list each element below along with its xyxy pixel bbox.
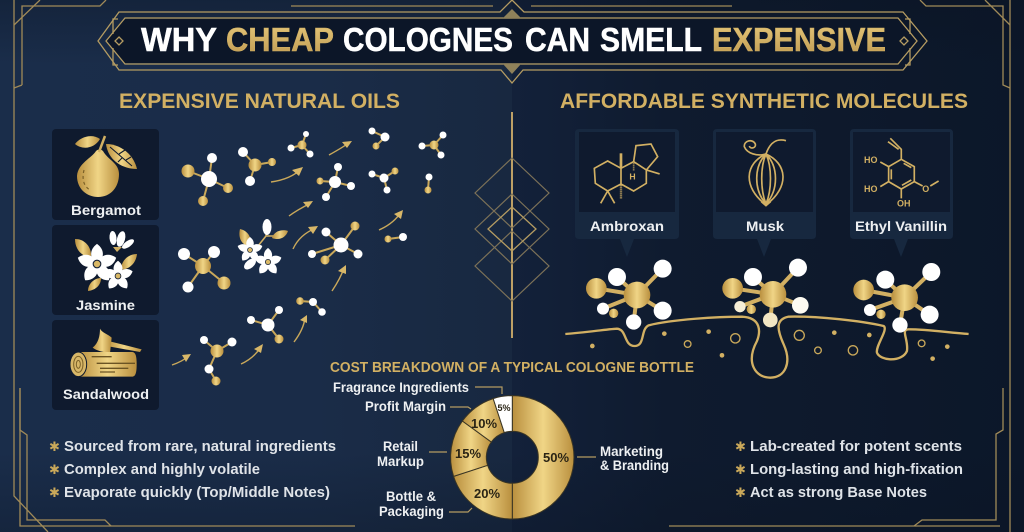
icon: ethyl vanillin structure: HO <box>864 184 877 194</box>
left bullet list: ✱ <box>49 463 60 478</box>
label: Ambroxan <box>590 218 664 234</box>
right bullet list: Act as strong Base Notes <box>750 484 927 501</box>
icon: ethyl vanillin structure: O <box>922 184 929 194</box>
label: Musk <box>746 218 784 234</box>
percent labels: 50% <box>543 450 569 465</box>
left bullet list: Sourced from rare, natural ingredients <box>64 438 336 455</box>
chart labels: Retail <box>383 439 418 454</box>
chart labels: & Branding <box>600 458 669 473</box>
percent labels: 15% <box>455 446 481 461</box>
heading: affordable synthetic molecules: AFFORDABLE SYNTHETIC MOLECULES <box>560 90 968 113</box>
molecules: natural oils evaporating <box>172 128 446 386</box>
title <box>141 21 886 58</box>
molecule b <box>722 259 809 327</box>
label: Sandalwood <box>63 386 149 402</box>
percent labels <box>455 403 569 501</box>
chart labels <box>333 380 669 519</box>
molecule 5 <box>418 132 446 158</box>
molecule 11 <box>178 246 230 292</box>
icon: musk pod <box>744 140 786 206</box>
percent labels: 5% <box>497 403 511 413</box>
molecule 9 <box>308 222 362 264</box>
right bullet list: Long-lasting and high-fixation <box>750 461 963 478</box>
title banner <box>98 0 927 83</box>
jasmine sprig <box>237 219 288 276</box>
title: COLOGNES <box>343 21 513 58</box>
right bullet list: ✱ <box>735 486 746 501</box>
icon: ethyl vanillin structure: HO <box>864 155 877 165</box>
molecule 13 <box>247 306 284 344</box>
center divider with diamonds <box>475 112 549 338</box>
card: bergamot <box>52 129 159 220</box>
molecule 2 <box>238 147 276 186</box>
right bullet list: ✱ <box>735 440 746 455</box>
icon: bergamot <box>75 136 137 197</box>
slices <box>451 396 574 519</box>
title: CAN <box>525 21 590 58</box>
molecule 12 <box>200 336 236 386</box>
chart labels: Marketing <box>600 444 663 459</box>
left bullet list: Evaporate quickly (Top/Middle Notes) <box>64 484 330 501</box>
chart labels: Fragrance Ingredients <box>333 380 469 395</box>
molecule 3 <box>288 131 314 158</box>
arrows <box>172 141 403 365</box>
icon: log and axe <box>70 329 142 377</box>
particles <box>590 329 950 361</box>
percent labels: 10% <box>471 416 497 431</box>
percent labels: 20% <box>474 486 500 501</box>
card: jasmine <box>52 225 159 315</box>
molecule a <box>586 260 672 330</box>
title: WHY <box>141 21 217 58</box>
label: Ethyl Vanillin <box>855 218 947 234</box>
card: musk <box>713 129 816 257</box>
left bullet list: ✱ <box>49 486 60 501</box>
molecule 6 <box>316 163 355 201</box>
molecule 4 <box>368 128 390 150</box>
chart labels: Profit Margin <box>365 399 446 414</box>
right bullet list: ✱ <box>735 463 746 478</box>
diagram: molecules penetrating skin <box>565 259 969 378</box>
title: CHEAP <box>226 21 334 58</box>
icon: ambroxan structure: H <box>629 171 636 181</box>
molecule 7 <box>368 168 398 194</box>
donut chart <box>451 396 574 519</box>
card: sandalwood <box>52 320 159 410</box>
right bullet list <box>735 438 963 501</box>
chart labels: Packaging <box>379 504 444 519</box>
title: SMELL <box>600 21 702 58</box>
molecule 8 <box>424 174 432 194</box>
heading: cost breakdown: COST BREAKDOWN OF A TYPICAL COLOGNE BOTTLE <box>330 360 694 376</box>
molecule c <box>853 263 940 333</box>
label: Jasmine <box>76 297 135 313</box>
icon: jasmine <box>75 230 137 291</box>
label: Bergamot <box>71 202 141 218</box>
card: ambroxan <box>575 129 679 257</box>
left bullet list: ✱ <box>49 440 60 455</box>
icon: ethyl vanillin structure: OH <box>897 199 910 209</box>
skin line <box>565 317 969 378</box>
chart labels: Bottle & <box>386 489 436 504</box>
heading: expensive natural oils: EXPENSIVE NATURAL OILS <box>119 90 400 113</box>
icon: ethyl vanillin structure <box>864 138 939 209</box>
molecule 14 <box>296 297 326 316</box>
right bullet list: Lab-created for potent scents <box>750 438 962 455</box>
title: EXPENSIVE <box>712 21 886 58</box>
card: ethyl vanillin <box>850 129 953 257</box>
molecule 10 <box>384 233 407 242</box>
molecule 1 <box>182 153 233 206</box>
chart labels: Markup <box>377 454 424 469</box>
left bullet list: Complex and highly volatile <box>64 461 260 478</box>
left bullet list <box>49 438 336 501</box>
